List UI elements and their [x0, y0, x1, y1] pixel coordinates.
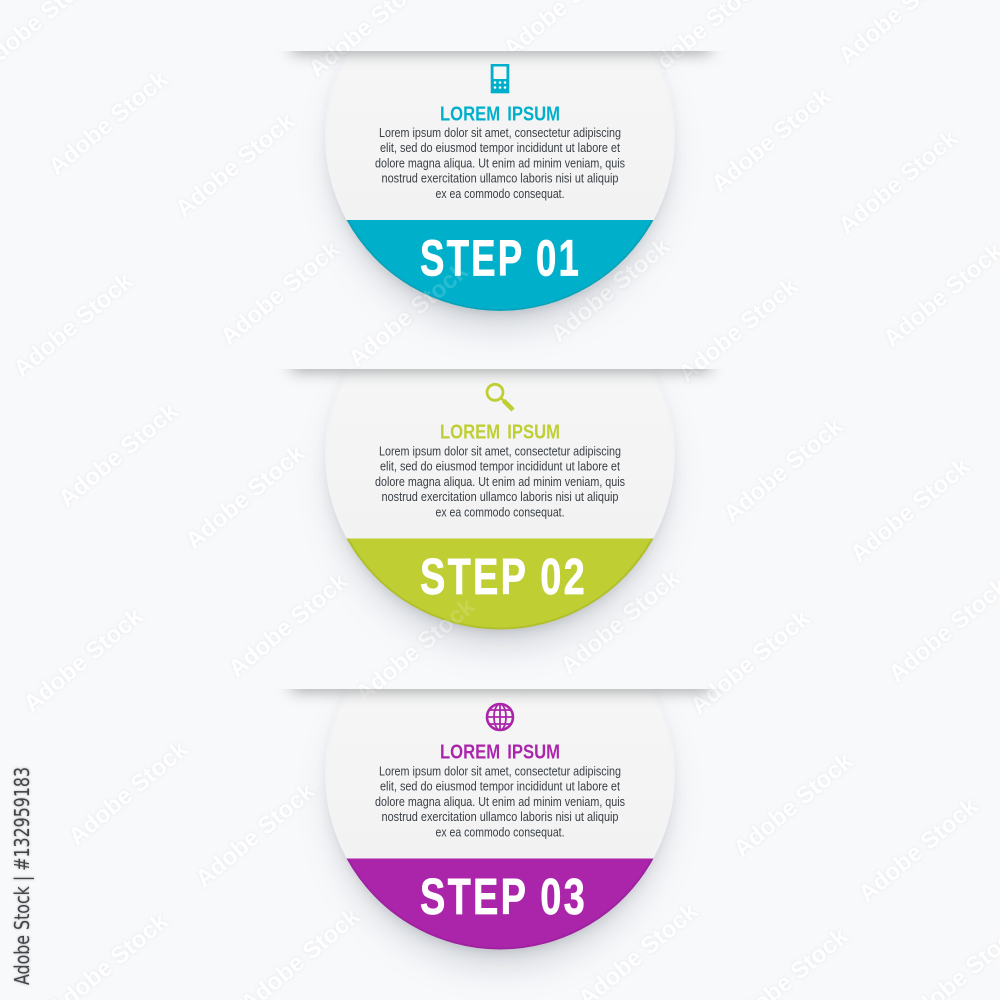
- watermark pattern: Adobe Stock: [845, 452, 976, 568]
- text block: step 03 description: dolore magna aliqua. Ut enim ad minim veniam, quis: [375, 794, 625, 809]
- icon: globe: [487, 704, 513, 730]
- text block: step 01 description: nostrud exercitation ullamco laboris nisi ut aliquip: [382, 170, 618, 186]
- text block: step 01 description: [375, 125, 625, 201]
- heading: lorem ipsum: LOREM IPSUM: [440, 102, 560, 126]
- label: step 03: STEP 03: [420, 868, 587, 925]
- watermark pattern: Adobe Stock: [853, 792, 984, 908]
- panel: step 02 card: [284, 369, 718, 658]
- watermark over cards: Adobe Stock: [343, 257, 474, 373]
- watermark pattern: Adobe Stock: [18, 602, 149, 718]
- text block: step 01 description: Lorem ipsum dolor sit amet, consectetur adipiscing: [379, 125, 621, 140]
- watermark over cards: Adobe Stock: [350, 592, 481, 708]
- watermark pattern: Adobe Stock: [223, 567, 354, 683]
- text block: step 02 description: ex ea commodo consequat.: [436, 504, 564, 520]
- text block: step 03 description: nostrud exercitation ullamco laboris nisi ut aliquip: [382, 809, 618, 824]
- watermark over cards: [343, 232, 704, 1000]
- text block: step 02 description: Lorem ipsum dolor sit amet, consectetur adipiscing: [379, 444, 621, 458]
- label: stock id: Adobe Stock | #132959183: [10, 767, 34, 985]
- watermark pattern: Adobe Stock: [170, 107, 301, 223]
- icon: mobile phone: [491, 64, 509, 93]
- text block: step 03 description: Lorem ipsum dolor sit amet, consectetur adipiscing: [379, 764, 621, 778]
- text block: step 02 description: dolore magna aliqua. Ut enim ad minim veniam, quis: [375, 474, 625, 489]
- watermark pattern: Adobe Stock: [685, 604, 816, 720]
- watermark pattern: Adobe Stock: [350, 592, 481, 708]
- watermark pattern: Adobe Stock: [343, 257, 474, 373]
- heading: lorem ipsum: LOREM IPSUM: [440, 420, 560, 444]
- watermark pattern: Adobe Stock: [728, 747, 859, 863]
- text block: step 02 description: elit, sed do eiusmod tempor incididunt ut labore et: [380, 458, 620, 474]
- text block: step 02 description: nostrud exercitation ullamco laboris nisi ut aliquip: [382, 489, 618, 504]
- text block: step 01 description: ex ea commodo consequat.: [436, 186, 564, 201]
- watermark pattern: Adobe Stock: [545, 232, 676, 348]
- text block: step 03 description: ex ea commodo consequat.: [436, 824, 564, 840]
- watermark pattern: Adobe Stock: [43, 65, 174, 181]
- text block: step 03 description: [375, 764, 625, 840]
- watermark pattern: Adobe Stock: [718, 412, 849, 528]
- watermark pattern: Adobe Stock: [53, 397, 184, 513]
- watermark pattern: Adobe Stock: [8, 267, 139, 383]
- icon: magnifier: [487, 384, 513, 410]
- text block: step 03 description: elit, sed do eiusmod tempor incididunt ut labore et: [380, 778, 620, 794]
- watermark over cards: Adobe Stock: [555, 564, 686, 680]
- label: step 01: STEP 01: [420, 230, 581, 286]
- heading: lorem ipsum: LOREM IPSUM: [440, 740, 560, 764]
- panel: step 03 card: [284, 689, 718, 978]
- watermark pattern: Adobe Stock: [555, 564, 686, 680]
- panel: step 01 card: [292, 0, 710, 325]
- watermark pattern: Adobe Stock: [63, 735, 194, 851]
- watermark pattern: Adobe Stock: [706, 82, 837, 198]
- watermark pattern: Adobe Stock: [190, 777, 321, 893]
- text block: step 01 description: elit, sed do eiusmod tempor incididunt ut labore et: [380, 140, 620, 155]
- label: step 02: STEP 02: [420, 548, 587, 605]
- text block: step 01 description: dolore magna aliqua. Ut enim ad minim veniam, quis: [375, 156, 625, 170]
- watermark over cards: Adobe Stock: [545, 232, 676, 348]
- text block: step 02 description: [375, 444, 625, 520]
- watermark pattern: Adobe Stock: [673, 272, 804, 388]
- watermark pattern: Adobe Stock: [180, 439, 311, 555]
- watermark pattern: Adobe Stock: [833, 124, 964, 240]
- watermark pattern: Adobe Stock: [215, 235, 346, 351]
